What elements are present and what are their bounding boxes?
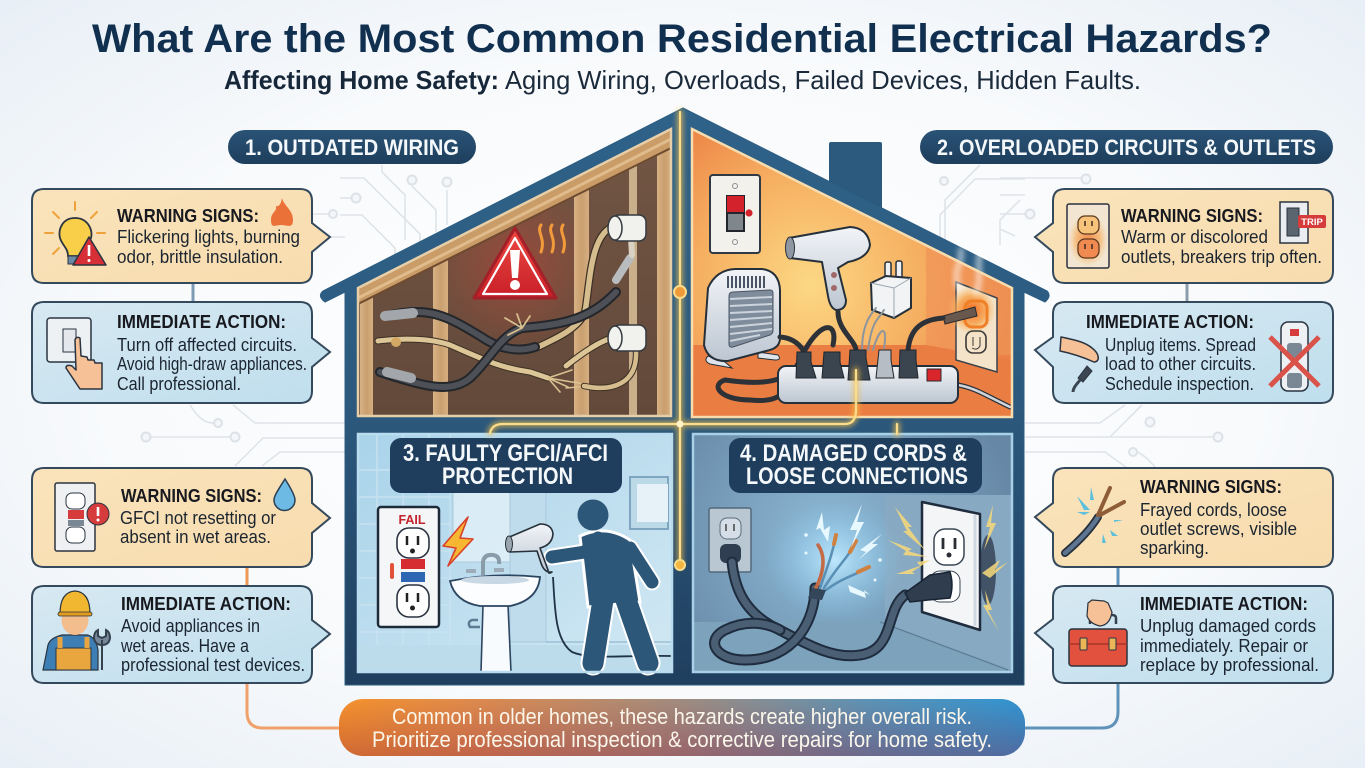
card: warning signs 3: GFCI not resetting or xyxy=(120,508,276,528)
panel 4 label: LOOSE CONNECTIONS xyxy=(746,463,968,490)
summary banner xyxy=(339,699,1025,756)
card: warning signs 1: Flickering lights, burning xyxy=(117,227,300,247)
card: immediate action 3: Avoid appliances in xyxy=(121,616,260,636)
hot outlet xyxy=(943,282,997,372)
card: immediate action 1: Call professional. xyxy=(117,374,241,394)
panel 4 label xyxy=(729,438,982,493)
cords xyxy=(718,308,1010,407)
damaged cable xyxy=(715,535,905,660)
person with dryer xyxy=(506,500,672,663)
icon: GFCI outlet with alert xyxy=(55,483,109,551)
house xyxy=(320,108,1049,685)
icon: hand unplugging xyxy=(1060,337,1098,392)
heading: overloaded circuits and outlets xyxy=(920,130,1333,164)
card: immediate action 4: immediately. Repair or xyxy=(1140,636,1308,656)
card: immediate action 2: load to other circuits. xyxy=(1105,354,1256,374)
card: warning signs 2: WARNING SIGNS: xyxy=(1121,205,1263,226)
subtitle xyxy=(224,65,1141,95)
heading: outdated wiring: 1. OUTDATED WIRING xyxy=(245,135,459,160)
card: warning signs 4: outlet screws, visible xyxy=(1140,519,1297,539)
wall switch xyxy=(710,175,760,253)
wires xyxy=(378,220,636,392)
card: immediate action 1: IMMEDIATE ACTION: xyxy=(117,311,286,332)
GFCI outlet xyxy=(378,507,439,627)
card: immediate action 3: IMMEDIATE ACTION: xyxy=(121,593,291,614)
icon: tripped breaker xyxy=(1280,202,1326,243)
insulators xyxy=(608,215,646,351)
subtitle: Aging Wiring, Overloads, Failed Devices, Hidden Faults. xyxy=(505,65,1141,95)
card: warning signs 2: Warm or discolored xyxy=(1121,227,1268,247)
blue sparks xyxy=(804,504,882,598)
lightning bolt xyxy=(443,517,473,566)
connectors to the summary banner xyxy=(193,283,1187,728)
card: warning signs 2 xyxy=(1035,189,1333,283)
background circuit traces xyxy=(142,165,1222,470)
panel 3 label: 3. FAULTY GFCI/AFCI xyxy=(403,440,608,467)
chimney xyxy=(829,142,882,212)
icon: worker with wrench xyxy=(43,591,110,670)
panel: faulty GFCI/AFCI xyxy=(358,434,672,672)
card: warning signs 1: odor, brittle insulation. xyxy=(117,247,283,267)
card: immediate action 3 xyxy=(32,586,330,683)
adapter xyxy=(871,261,911,318)
icon: tripped breaker: TRIP xyxy=(1301,217,1323,228)
card: warning signs 1: WARNING SIGNS: xyxy=(117,205,259,226)
warning triangle xyxy=(474,228,556,298)
icon: light bulb with alert xyxy=(45,202,106,265)
heading: outdated wiring xyxy=(228,130,476,164)
wall outlet with plug xyxy=(905,502,996,630)
icon: hot outlets xyxy=(1067,204,1109,268)
icon: frayed cord xyxy=(1065,487,1124,553)
picture xyxy=(630,477,668,529)
card: immediate action 2: Unplug items. Spread xyxy=(1105,335,1256,355)
card: warning signs 2: outlets, breakers trip often. xyxy=(1121,247,1322,267)
card: immediate action 3: professional test devices. xyxy=(121,655,305,675)
card: warning signs 1 xyxy=(32,189,330,283)
icon: switch with hand xyxy=(47,318,102,389)
small outlet xyxy=(709,508,751,572)
panel: damaged cords xyxy=(693,434,1012,672)
hair dryer xyxy=(786,227,870,310)
summary banner: Prioritize professional inspection & corrective repairs for home safety. xyxy=(372,727,992,752)
card: immediate action 1 xyxy=(32,302,330,403)
icon: crossed power strip xyxy=(1270,322,1319,391)
card: immediate action 4 xyxy=(1035,586,1333,683)
card: immediate action 2: Schedule inspection. xyxy=(1105,374,1254,394)
icon: flame xyxy=(271,198,293,226)
card: immediate action 1: Turn off affected circuits. xyxy=(117,335,297,355)
card: warning signs 3 xyxy=(32,468,330,567)
smoke xyxy=(956,245,985,295)
card: warning signs 4: Frayed cords, loose xyxy=(1140,500,1287,520)
panel: overloaded circuits xyxy=(692,129,1012,417)
card: immediate action 3: wet areas. Have a xyxy=(120,636,250,656)
icon: toolbox xyxy=(1069,600,1127,666)
space heater xyxy=(704,269,780,368)
house frame xyxy=(320,108,1049,685)
yellow sparks xyxy=(888,505,1008,632)
panel 3 label: PROTECTION xyxy=(442,463,573,490)
subtitle: Affecting Home Safety: xyxy=(224,65,499,95)
GFCI outlet: FAIL xyxy=(398,513,426,527)
sink xyxy=(450,555,540,672)
card: immediate action 1: Avoid high-draw appliances. xyxy=(117,354,307,374)
card: immediate action 2: IMMEDIATE ACTION: xyxy=(1086,311,1254,332)
power strip xyxy=(778,350,958,403)
card: warning signs 4: WARNING SIGNS: xyxy=(1140,476,1282,497)
title: What Are the Most Common Residential Electrical Hazards? xyxy=(92,17,1272,61)
summary banner: Common in older homes, these hazards create higher overall risk. xyxy=(392,704,972,729)
card: warning signs 3: WARNING SIGNS: xyxy=(121,485,262,506)
card: immediate action 4: IMMEDIATE ACTION: xyxy=(1140,593,1308,614)
panel 3 label xyxy=(390,438,622,493)
card: immediate action 4: replace by professional. xyxy=(1140,655,1319,675)
heading: overloaded circuits and outlets: 2. OVERLOADED CIRCUITS & OUTLETS xyxy=(937,135,1316,160)
card: warning signs 4 xyxy=(1035,468,1333,567)
panel 4 label: 4. DAMAGED CORDS & xyxy=(740,440,967,467)
panel: outdated wiring xyxy=(358,129,671,416)
card: immediate action 4: Unplug damaged cords xyxy=(1140,616,1316,636)
icon: water drop xyxy=(274,479,295,510)
glowing circuit lines xyxy=(490,112,897,570)
card: immediate action 2 xyxy=(1035,302,1333,403)
card: warning signs 3: absent in wet areas. xyxy=(120,527,271,547)
card: warning signs 4: sparking. xyxy=(1140,538,1209,558)
heat waves xyxy=(540,225,564,252)
